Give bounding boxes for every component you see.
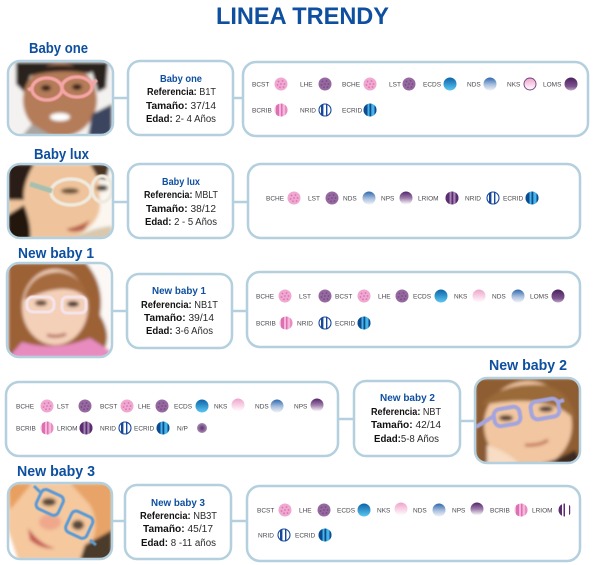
swatch: BCST	[335, 290, 370, 302]
swatch: LST	[299, 290, 332, 302]
swatch: LHE	[300, 78, 332, 90]
swatch: BCST	[100, 400, 134, 412]
swatch: NRID	[258, 528, 290, 542]
info box: Referencia: NBT	[371, 407, 441, 418]
swatch: NKS	[507, 78, 536, 90]
swatch: ECDS: ECDS	[174, 404, 193, 410]
swatch: LHE: LHE	[300, 82, 313, 88]
panel: lens colours	[247, 272, 580, 347]
info box: Tamaño: 39/14	[144, 313, 214, 324]
connectors	[113, 97, 243, 99]
swatch: BCST: BCST	[257, 508, 274, 514]
info box: Edad: 2 - 5 Años	[145, 217, 217, 228]
swatch: BCHE: BCHE	[266, 196, 285, 202]
swatch: NDS	[492, 290, 524, 302]
swatch: NRID	[300, 103, 331, 117]
info box: Edad: 8 -11 años	[141, 538, 216, 549]
section: New baby 2	[6, 357, 582, 469]
title: LINEA TRENDY	[216, 3, 389, 30]
swatch: ECRID: ECRID	[342, 108, 363, 114]
swatch: ECRID	[335, 316, 372, 330]
info box	[354, 381, 460, 456]
info box: Edad:5-8 Años	[374, 434, 439, 445]
swatch: NRID: NRID	[100, 426, 116, 432]
swatch: BCHE: BCHE	[342, 82, 361, 88]
swatch: ECDS	[413, 290, 448, 302]
swatch: BCRIB: BCRIB	[256, 320, 276, 328]
swatch: NRID: NRID	[258, 532, 274, 540]
swatch: NPS	[452, 502, 484, 516]
heading: Baby one: Baby one	[29, 40, 88, 57]
info box	[127, 274, 232, 348]
swatch: ECRID	[134, 421, 170, 435]
swatch: LOMS: LOMS	[543, 82, 562, 88]
info box: Tamaño: 38/12	[146, 204, 216, 215]
swatch: NDS: NDS	[413, 508, 427, 514]
info box: Referencia: NB1T	[141, 300, 218, 311]
swatch: NDS: NDS	[343, 196, 357, 202]
section: Baby lux	[8, 146, 580, 240]
swatch: NRID: NRID	[465, 196, 481, 202]
info box: Referencia: B1T	[147, 87, 216, 98]
swatch: BCST: BCST	[252, 82, 269, 88]
swatch: NKS	[377, 502, 408, 516]
swatch: BCHE: BCHE	[256, 294, 275, 300]
swatch: BCRIB	[16, 421, 54, 435]
swatch: LHE: LHE	[299, 508, 312, 514]
swatch: BCHE	[256, 290, 292, 302]
connectors	[113, 201, 248, 203]
swatch: NPS	[294, 398, 324, 412]
swatch: BCHE	[342, 78, 376, 90]
swatch: NDS: NDS	[467, 82, 481, 88]
heading: New baby 1: New baby 1	[18, 245, 94, 262]
photo: child with pale glasses	[8, 164, 114, 240]
swatch: ECRID	[342, 103, 378, 117]
swatch: LOMS	[530, 290, 564, 302]
swatch: NRID	[100, 421, 131, 435]
swatch: BCST	[252, 78, 288, 90]
swatch: LRIOM	[532, 503, 572, 517]
swatch: LST: LST	[389, 82, 401, 88]
swatch: LRIOM	[57, 421, 94, 435]
swatch: LST	[57, 400, 92, 412]
swatch: LHE: LHE	[378, 294, 391, 300]
heading: Baby lux: Baby lux	[34, 146, 90, 163]
info box: Baby lux	[162, 177, 200, 188]
swatch: BCRIB: BCRIB	[490, 508, 510, 514]
swatch: NPS: NPS	[381, 196, 395, 202]
info box: Baby one	[160, 74, 202, 85]
swatch: BCHE	[16, 400, 54, 412]
connectors	[112, 520, 247, 522]
swatch: NRID: NRID	[300, 108, 316, 114]
swatch: BCST	[257, 504, 292, 516]
swatch: NDS	[413, 504, 446, 516]
swatch: LHE: LHE	[138, 404, 151, 410]
swatch: LST: LST	[299, 294, 311, 300]
photo: girl with lavender glasses	[475, 378, 582, 469]
swatch: NKS	[214, 398, 244, 412]
swatch: ECDS	[174, 400, 208, 412]
swatch: NDS	[255, 400, 284, 412]
swatch: LRIOM: LRIOM	[532, 508, 553, 514]
swatch: ECRID: ECRID	[295, 532, 316, 540]
section: New baby 1	[7, 245, 580, 358]
swatch: ECDS	[337, 504, 370, 516]
info box: Referencia: NB3T	[140, 511, 217, 522]
panel: lens colours	[248, 164, 580, 238]
swatch: NDS: NDS	[492, 294, 506, 300]
photo: child with blue glasses	[8, 483, 113, 560]
swatch: NPS: NPS	[294, 404, 308, 410]
swatch: LOMS	[543, 78, 578, 90]
info box: Edad: 2- 4 Años	[146, 114, 216, 125]
swatch: BCHE: BCHE	[16, 404, 35, 410]
swatch: LOMS: LOMS	[530, 294, 549, 300]
swatch: BCRIB	[256, 316, 293, 330]
info box	[128, 164, 233, 238]
swatch: BCRIB	[490, 503, 528, 517]
swatch: LHE	[299, 504, 330, 516]
swatch: NKS: NKS	[507, 82, 521, 88]
swatch: NKS: NKS	[377, 508, 391, 514]
connectors	[112, 310, 247, 312]
info box: Tamaño: 37/14	[146, 101, 216, 112]
swatch: NRID	[297, 316, 331, 330]
info box: New baby 3	[151, 498, 205, 509]
swatch: BCST: BCST	[100, 404, 117, 410]
swatch: NPS: NPS	[452, 508, 466, 514]
swatch: NKS: NKS	[214, 404, 228, 410]
swatch: NPS	[381, 192, 412, 204]
swatch: BCRIB: BCRIB	[252, 108, 272, 114]
info box: New baby 2	[380, 393, 435, 404]
swatch: LRIOM: LRIOM	[418, 196, 439, 202]
swatch: LHE	[378, 290, 408, 302]
swatch: BCHE	[266, 192, 300, 204]
swatch: BCRIB	[252, 103, 288, 117]
swatch: BCRIB: BCRIB	[16, 426, 36, 432]
swatch: NKS: NKS	[454, 294, 468, 300]
info box: Tamaño: 42/14	[371, 420, 441, 431]
swatch: N/P: N/P	[177, 426, 188, 432]
info box: Referencia: MBLT	[144, 190, 218, 201]
swatch: ECRID: ECRID	[134, 426, 155, 432]
section: Baby one	[8, 40, 588, 137]
section: New baby 3	[8, 463, 580, 561]
info box: New baby 1	[152, 286, 206, 297]
swatch: ECDS: ECDS	[337, 508, 356, 514]
swatch: ECRID	[295, 528, 332, 542]
swatch: LST	[389, 78, 416, 90]
panel: lens colours	[247, 486, 580, 561]
swatch: ECRID: ECRID	[503, 196, 524, 202]
swatch: LST	[308, 192, 338, 204]
swatch: ECDS: ECDS	[423, 82, 442, 88]
heading: New baby 2: New baby 2	[489, 357, 567, 374]
swatch: LRIOM	[418, 191, 460, 205]
swatch: NRID	[465, 191, 499, 205]
panel: lens colours	[6, 382, 338, 456]
swatch: NRID: NRID	[297, 320, 313, 328]
swatch: ECDS: ECDS	[413, 294, 432, 300]
swatch: NDS: NDS	[255, 404, 269, 410]
info box: Edad: 3-6 Años	[146, 326, 213, 337]
swatch: NDS	[343, 192, 376, 204]
panel: lens colours	[243, 62, 588, 136]
photo: girl with white and pink glasses	[7, 263, 113, 358]
swatch: LHE	[138, 400, 168, 412]
swatch: ECRID: ECRID	[335, 320, 356, 328]
swatch: N/P	[177, 423, 207, 433]
info box	[125, 485, 231, 559]
swatch: ECRID	[503, 191, 540, 205]
swatch: NDS	[467, 78, 496, 90]
swatch: ECDS	[423, 78, 456, 90]
swatch: LRIOM: LRIOM	[57, 426, 78, 432]
photo: child with pink glasses	[8, 60, 114, 137]
heading: New baby 3: New baby 3	[17, 463, 95, 480]
swatch: NKS	[454, 290, 486, 302]
connectors	[338, 419, 475, 421]
info box	[128, 61, 233, 135]
swatch: BCST: BCST	[335, 294, 352, 300]
swatch: LST: LST	[308, 196, 320, 202]
swatch: LST: LST	[57, 404, 69, 410]
info box: Tamaño: 45/17	[143, 524, 213, 535]
